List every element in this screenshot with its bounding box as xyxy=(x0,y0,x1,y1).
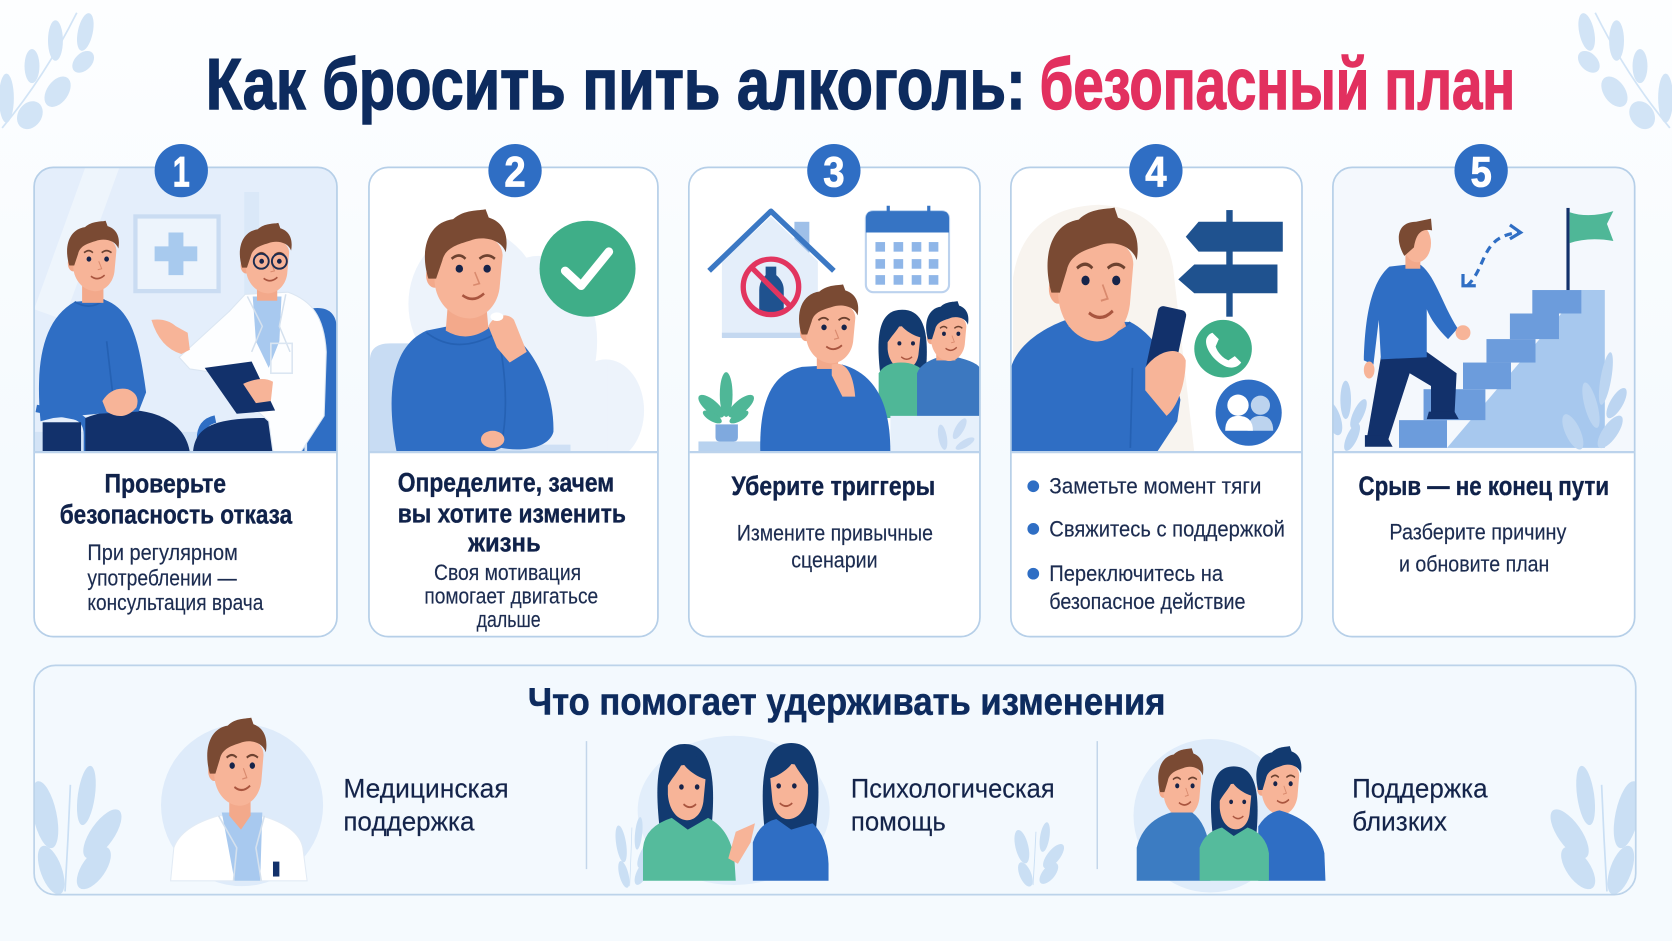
label psychological: Психологическая xyxy=(851,774,1055,804)
decorative leaves: top left xyxy=(0,12,98,134)
bullet list step 4 xyxy=(1027,474,1285,614)
bullet list step 4: Переключитесь на xyxy=(1049,561,1224,586)
text step 3: сценарии xyxy=(791,547,878,572)
heading step 2: Определите, зачем xyxy=(398,468,614,498)
support: medical xyxy=(161,718,509,886)
heading support: Что помогает удерживать изменения xyxy=(528,680,1165,723)
panel: step 1 xyxy=(34,144,337,637)
badge 5 xyxy=(1454,144,1508,197)
illustration: man with phone and support icons xyxy=(1011,205,1194,452)
panel: step 3 xyxy=(689,144,980,637)
panel: step 4 xyxy=(1011,144,1302,637)
heading step 2: жизнь xyxy=(467,527,541,557)
title: безопасный план xyxy=(1040,44,1515,125)
heading step 1: безопасность отказа xyxy=(60,500,292,530)
badge 4 xyxy=(1129,144,1183,197)
bullet list step 4: Заметьте момент тяги xyxy=(1049,474,1261,499)
label medical xyxy=(343,774,509,837)
decorative leaves: top right xyxy=(1574,12,1672,134)
label psychological xyxy=(851,774,1055,837)
panel: step 5 xyxy=(1320,144,1635,637)
text step 5 xyxy=(1389,520,1566,577)
text step 5: и обновите план xyxy=(1399,552,1549,577)
badge 3: 3 xyxy=(823,149,845,197)
text step 5: Разберите причину xyxy=(1389,520,1566,545)
badge 1 xyxy=(155,144,208,197)
icon: doctor xyxy=(161,718,323,886)
heading step 2: вы хотите изменить xyxy=(398,499,626,529)
icon: family group xyxy=(1134,739,1325,893)
illustration: home without triggers xyxy=(695,206,980,452)
heading step 3: Уберите триггеры xyxy=(732,471,935,501)
bullet list step 4: Свяжитесь с поддержкой xyxy=(1049,516,1285,541)
badge 4: 4 xyxy=(1145,149,1167,197)
badge 1: 1 xyxy=(173,149,190,197)
text step 2: дальше xyxy=(477,607,541,632)
support: psychological xyxy=(613,736,1068,890)
illustration: patient and doctor xyxy=(34,167,337,452)
icon: signpost xyxy=(1178,210,1283,317)
illustration: thinking man with check xyxy=(370,209,644,462)
heading step 1: Проверьте xyxy=(104,469,226,499)
label family: Поддержка xyxy=(1352,774,1488,804)
illustration: man climbing stairs to flag xyxy=(1320,167,1635,453)
label medical: Медицинская xyxy=(343,774,509,804)
heading step 1 xyxy=(60,469,292,530)
label medical: поддержка xyxy=(343,807,475,837)
badge 3 xyxy=(807,144,861,197)
panel: what helps keep changes xyxy=(26,665,1646,898)
text step 1: консультация врача xyxy=(87,590,264,615)
heading step 5: Срыв — не конец пути xyxy=(1358,471,1609,501)
heading step 2 xyxy=(398,468,626,557)
icon: people xyxy=(1216,380,1282,446)
bullet list step 4: безопасное действие xyxy=(1049,589,1245,614)
badge 5: 5 xyxy=(1470,149,1492,197)
label psychological: помощь xyxy=(851,807,946,837)
text step 1: При регулярном xyxy=(87,540,238,565)
badge 2 xyxy=(488,144,542,197)
icon: two women talking xyxy=(613,736,1068,890)
panel: step 2 xyxy=(369,144,658,637)
leaves: bottom right xyxy=(1550,766,1635,894)
icon: phone call xyxy=(1194,320,1252,377)
badge 2: 2 xyxy=(504,149,526,197)
label family xyxy=(1352,774,1488,837)
text step 3 xyxy=(737,521,933,572)
text step 2 xyxy=(424,560,598,632)
text step 2: помогает двигатьсе xyxy=(424,584,598,609)
icon: check mark xyxy=(540,221,636,317)
text step 3: Измените привычные xyxy=(737,521,933,546)
text step 2: Своя мотивация xyxy=(434,560,581,585)
title: Как бросить пить алкоголь: xyxy=(206,44,1026,125)
support: family xyxy=(1134,739,1488,893)
text step 1 xyxy=(87,540,264,615)
leaves: bottom left xyxy=(35,766,122,894)
text step 1: употреблении — xyxy=(87,565,237,590)
label family: близких xyxy=(1352,807,1448,837)
